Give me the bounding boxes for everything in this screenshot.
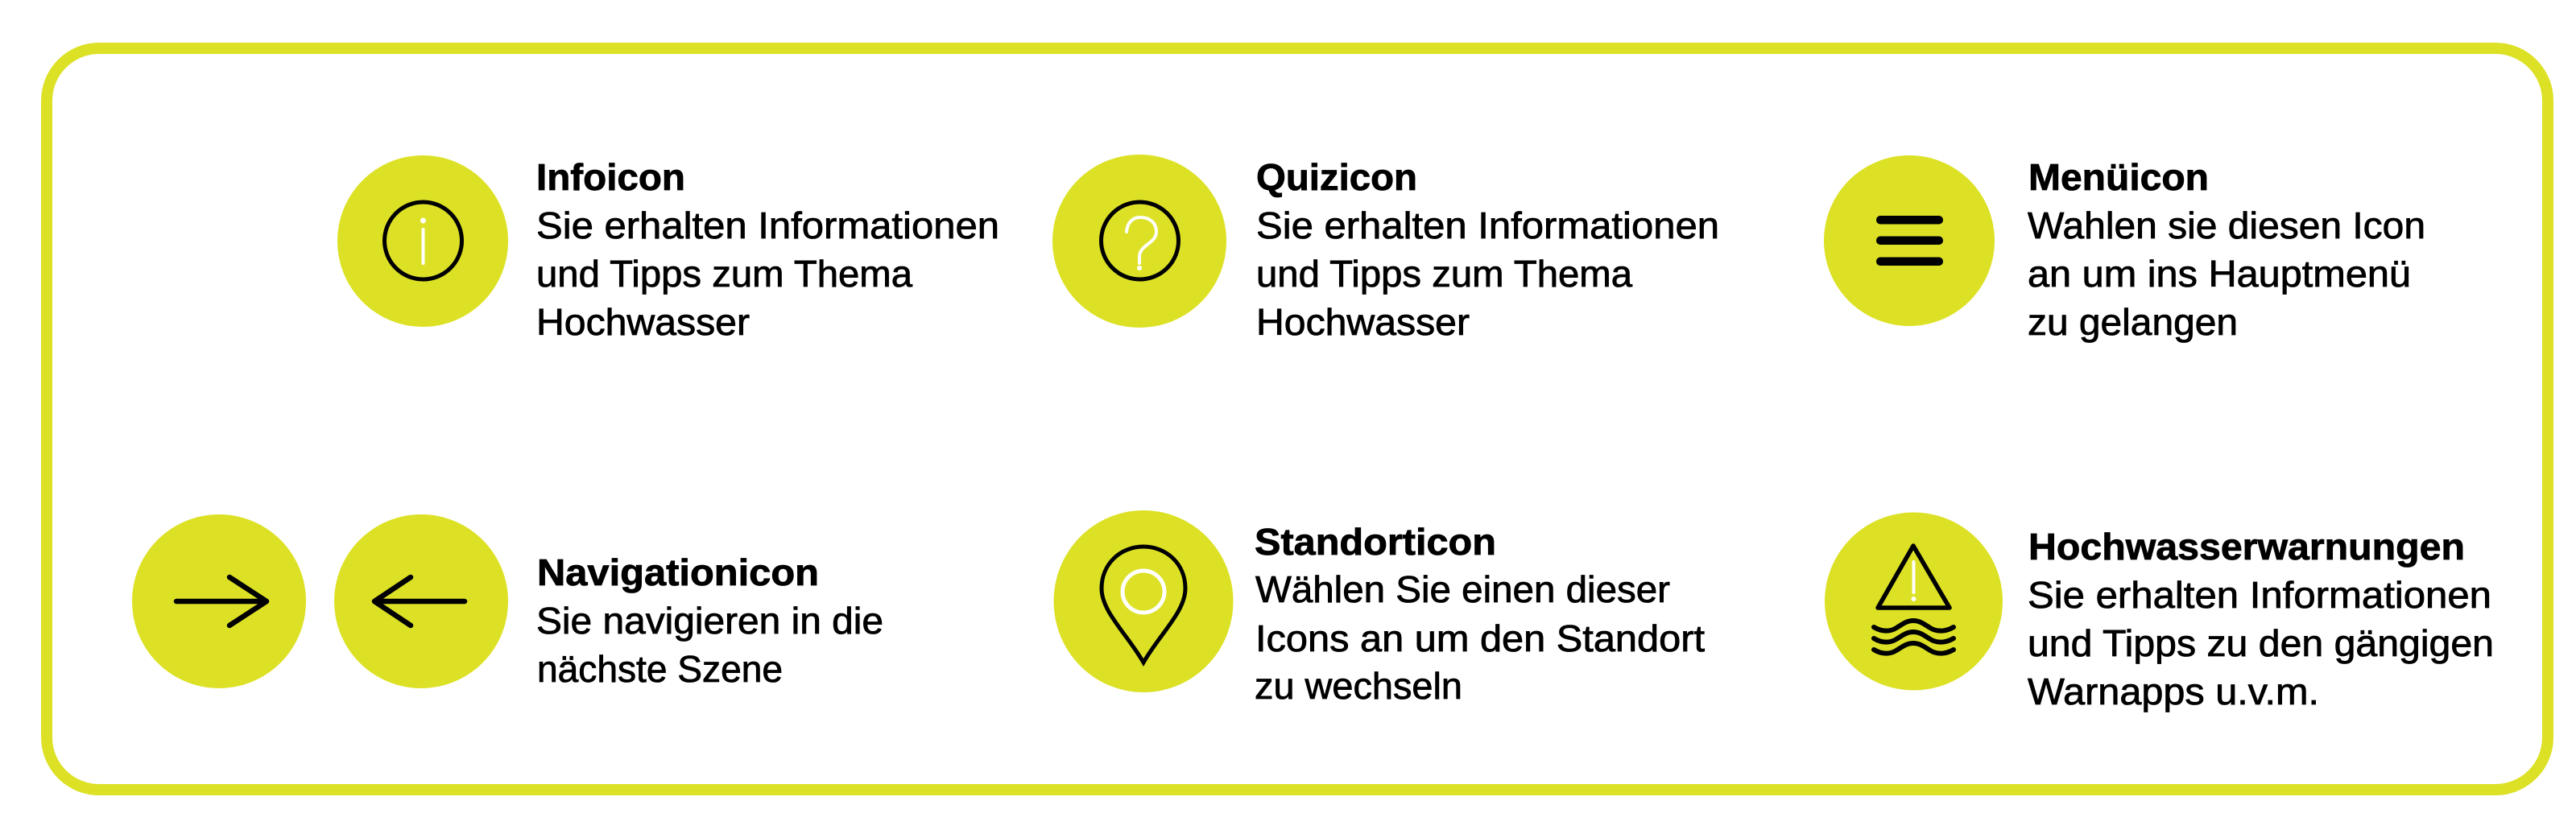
text: Navigationicon: Sie navigieren in die — [536, 600, 883, 642]
text: Navigationicon: nächste Szene — [537, 648, 783, 690]
item: Quizicon — [1052, 155, 1719, 343]
text: Standorticon: Wählen Sie einen dieser — [1255, 568, 1670, 610]
icon: info — [337, 155, 508, 327]
text: Hochwasserwarnungen: Hochwasserwarnungen — [2028, 526, 2465, 568]
text: Navigationicon — [536, 551, 883, 690]
item: Menüicon — [1824, 155, 2425, 343]
icon: menu — [1824, 155, 1995, 326]
icon: location pin — [1053, 510, 1234, 692]
text: Infoicon: Hochwasser — [536, 301, 750, 343]
text: Infoicon: Sie erhalten Informationen — [536, 204, 999, 246]
item: Navigationicon — [132, 514, 883, 690]
text: Standorticon — [1255, 521, 1705, 707]
text: Standorticon: zu wechseln — [1255, 665, 1462, 707]
text: Quizicon: und Tipps zum Thema — [1256, 253, 1632, 295]
icon: quiz — [1052, 155, 1226, 328]
text: Menüicon — [2028, 156, 2425, 343]
text: Hochwasserwarnungen: Sie erhalten Informationen — [2028, 574, 2491, 616]
text: Quizicon: Quizicon — [1256, 156, 1417, 198]
icon: flood warning — [1825, 512, 2003, 691]
item: Hochwasserwarnungen — [1825, 512, 2494, 712]
text: Hochwasserwarnungen — [2028, 526, 2494, 712]
text: Quizicon: Sie erhalten Informationen — [1256, 204, 1719, 246]
text: Standorticon: Standorticon — [1255, 521, 1496, 563]
text: Infoicon: und Tipps zum Thema — [536, 253, 912, 295]
text: Hochwasserwarnungen: Warnapps u.v.m. — [2028, 671, 2319, 712]
item: Standorticon — [1053, 510, 1705, 707]
item: Infoicon — [337, 155, 999, 343]
text: Menüicon: zu gelangen — [2028, 301, 2238, 343]
icon: arrow left — [334, 514, 508, 688]
icon: arrow right — [132, 514, 306, 688]
text: Quizicon — [1256, 156, 1719, 343]
text: Standorticon: Icons an um den Standort — [1255, 617, 1705, 659]
text: Menüicon: Menüicon — [2028, 156, 2209, 198]
text: Quizicon: Hochwasser — [1256, 301, 1470, 343]
text: Menüicon: an um ins Hauptmenü — [2028, 253, 2411, 295]
text: Menüicon: Wahlen sie diesen Icon — [2028, 204, 2425, 246]
text: Infoicon: Infoicon — [536, 156, 685, 198]
text: Infoicon — [536, 156, 999, 343]
text: Hochwasserwarnungen: und Tipps zu den gängigen — [2028, 622, 2494, 664]
text: Navigationicon: Navigationicon — [537, 551, 819, 593]
